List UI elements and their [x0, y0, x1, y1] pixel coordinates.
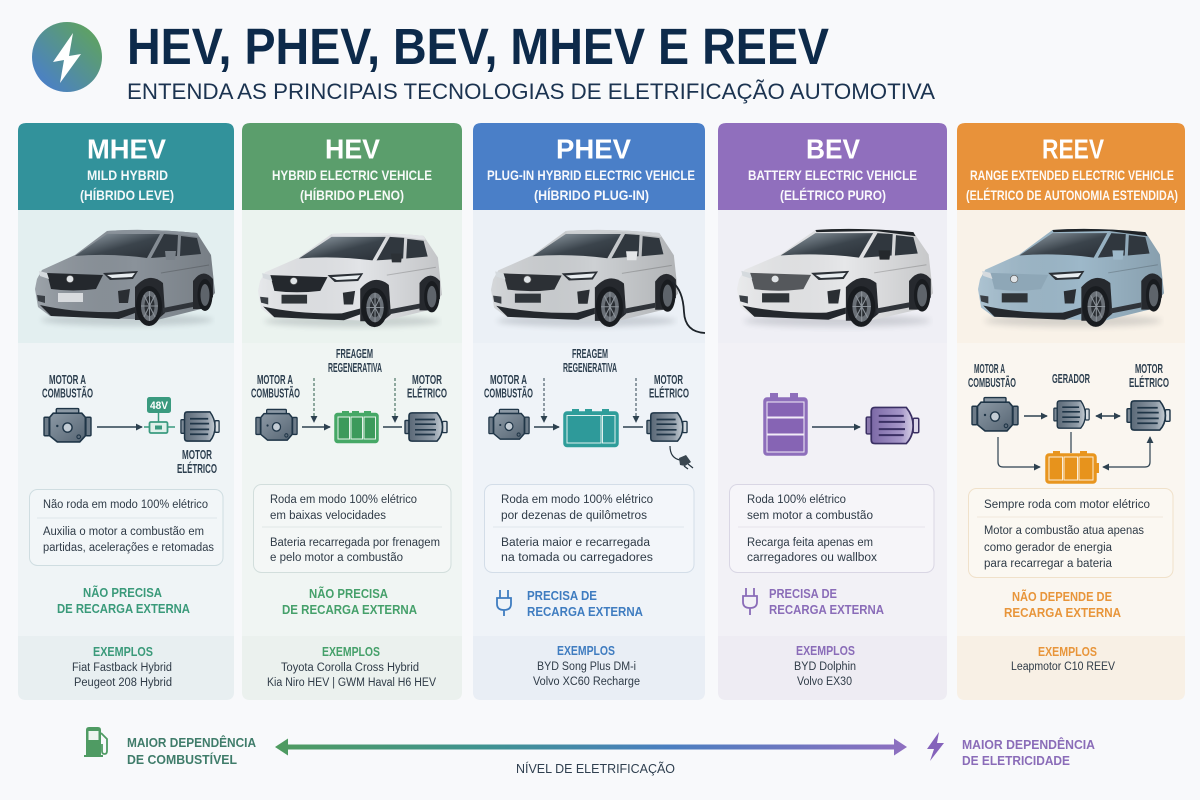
examples: HEV: Toyota Corolla Cross Hybrid — [281, 662, 419, 674]
label: motor a combustão — [484, 373, 533, 400]
heading: MHEV: (HÍBRIDO LEVE) — [80, 187, 174, 203]
text box: HEV facts: e pelo motor a combustão — [270, 552, 403, 564]
heading: BEV — [718, 123, 947, 210]
recharge note: REEV: RECARGA EXTERNA — [1004, 606, 1121, 620]
text box: HEV facts: em baixas velocidades — [270, 510, 386, 522]
examples: MHEV: Fiat Fastback Hybrid — [72, 662, 172, 674]
arrow: battery to motor — [812, 426, 860, 428]
examples: MHEV: Peugeot 208 Hybrid — [74, 677, 172, 689]
text box: PHEV facts: Bateria maior e recarregada — [501, 537, 651, 549]
arrow: engine to converter — [97, 426, 142, 428]
examples: HEV — [267, 645, 436, 689]
image band: REEV — [957, 210, 1185, 343]
heading: HEV: HYBRID ELECTRIC VEHICLE — [272, 167, 432, 183]
examples band: HEV — [242, 636, 462, 700]
icon: 48V converter: 48V — [150, 400, 169, 412]
icon: electricity bolt — [927, 732, 944, 761]
examples band: PHEV — [473, 636, 705, 700]
text box: REEV facts: Sempre roda com motor elétrico — [984, 499, 1150, 511]
arrow: regenerative braking 1 — [313, 378, 315, 422]
recharge note: MHEV — [57, 585, 190, 616]
label: fuel dependence — [127, 735, 256, 767]
label: motor elétrico: ELÉTRICO — [649, 386, 689, 400]
label: nível de eletrificação: NÍVEL DE ELETRIFICAÇÃO — [516, 761, 675, 776]
icon: purple battery — [764, 393, 807, 455]
heading: BEV: (ELÉTRICO PURO) — [780, 187, 886, 203]
recharge note: HEV: DE RECARGA EXTERNA — [282, 603, 417, 617]
label: freagem regenerativa: REGENERATIVA — [328, 361, 382, 375]
recharge note: BEV: PRECISA DE — [769, 587, 837, 601]
icon: combustion engine — [972, 398, 1018, 431]
label: motor elétrico: ELÉTRICO — [177, 461, 217, 476]
icon: electric motor — [405, 413, 447, 441]
heading: REEV — [957, 123, 1185, 210]
text box: PHEV facts: por dezenas de quilômetros — [501, 510, 647, 522]
recharge note: PHEV: RECARGA EXTERNA — [527, 605, 643, 619]
icon: combustion engine — [489, 409, 529, 439]
icon: electric motor — [866, 407, 919, 444]
text box: BEV facts: Recarga feita apenas em — [747, 537, 873, 549]
label: motor a combustão — [968, 362, 1016, 390]
arrow: generator to motor — [1096, 415, 1120, 417]
text box: BEV facts: carregadores ou wallbox — [747, 552, 877, 564]
icon: lightning logo — [32, 22, 102, 92]
text box: MHEV facts: Auxilia o motor a combustão em — [43, 526, 204, 538]
heading: PHEV: (HÍBRIDO PLUG-IN) — [534, 187, 649, 203]
text box: MHEV facts: partidas, acelerações e retomadas — [43, 542, 214, 554]
heading: MHEV: MILD HYBRID — [87, 167, 168, 183]
icon: combustion engine — [256, 409, 297, 440]
arrow: regenerative braking 1 — [543, 378, 545, 422]
text box: REEV facts: Motor a combustão atua apenas — [984, 525, 1144, 537]
connector: generator to battery — [1070, 432, 1072, 453]
recharge note: PHEV: PRECISA DE — [527, 589, 597, 603]
image band: BEV — [718, 210, 947, 343]
icon: 48V converter — [144, 397, 175, 433]
icon: charging plug — [670, 446, 693, 469]
heading: HEV — [242, 123, 462, 210]
panel: HEV — [242, 123, 462, 700]
label: freagem regenerativa: REGENERATIVA — [563, 361, 617, 375]
label: motor a combustão: COMBUSTÃO — [968, 375, 1016, 390]
arrow: electrification scale — [275, 738, 907, 756]
heading: MHEV: MHEV — [87, 134, 166, 164]
label: electricity dependence — [962, 737, 1095, 768]
heading: BEV: BEV — [806, 134, 860, 164]
title: HEV, PHEV, BEV, MHEV E REEV — [127, 18, 829, 75]
label: motor elétrico: MOTOR — [412, 373, 442, 387]
icon: combustion engine — [44, 409, 91, 442]
diagram: BEV powertrain — [764, 393, 919, 455]
label: motor a combustão — [42, 373, 93, 400]
icon: teal battery — [564, 409, 618, 446]
examples: REEV — [1011, 645, 1115, 673]
text box: BEV facts: sem motor a combustão — [747, 510, 873, 522]
recharge note: PHEV — [527, 589, 643, 619]
charging cable — [672, 282, 705, 333]
subtitle: ENTENDA AS PRINCIPAIS TECNOLOGIAS DE ELETRIFICAÇÃO AUTOMOTIVA — [127, 79, 935, 104]
examples: BEV: Volvo EX30 — [797, 676, 852, 688]
recharge note: MHEV: DE RECARGA EXTERNA — [57, 602, 190, 616]
recharge note: BEV: RECARGA EXTERNA — [769, 603, 884, 617]
heading: MHEV — [18, 123, 234, 210]
icon: purple plug — [743, 588, 757, 615]
image band: HEV — [242, 210, 462, 343]
arrow: battery to motor — [1103, 437, 1150, 467]
text box: HEV facts: Bateria recarregada por frenagem — [270, 537, 440, 549]
label: motor elétrico: MOTOR — [654, 373, 683, 387]
label: fuel dependence: DE COMBUSTÍVEL — [127, 752, 237, 767]
label: motor a combustão: COMBUSTÃO — [42, 386, 93, 400]
label: motor elétrico: ELÉTRICO — [1129, 375, 1169, 390]
text box: BEV facts: Roda 100% elétrico — [747, 494, 846, 506]
text box: REEV facts: como gerador de energia — [984, 542, 1113, 554]
icon: fuel pump — [84, 727, 107, 757]
icon: electric motor — [1127, 401, 1170, 430]
label: motor a combustão: MOTOR A — [490, 373, 527, 387]
label: motor a combustão: COMBUSTÃO — [251, 386, 300, 400]
examples band: BEV — [718, 636, 947, 700]
car: white electric hatch — [737, 229, 933, 327]
header — [32, 18, 935, 104]
text box: PHEV facts: na tomada ou carregadores — [501, 552, 653, 564]
label: motor elétrico: MOTOR — [182, 448, 212, 462]
icon: electric motor — [647, 413, 687, 441]
examples: REEV: Leapmotor C10 REEV — [1011, 661, 1115, 673]
heading: PHEV — [473, 123, 705, 210]
text box: BEV facts — [730, 484, 934, 572]
panel: BEV — [718, 123, 947, 700]
text box: PHEV facts: Roda em modo 100% elétrico — [501, 494, 653, 506]
diagram: HEV powertrain — [251, 347, 447, 442]
arrow: engine to generator — [1024, 415, 1047, 417]
examples: HEV: Kia Niro HEV | GWM Haval H6 HEV — [267, 677, 436, 689]
label: electricity dependence: MAIOR DEPENDÊNCIA — [962, 737, 1095, 752]
image band: PHEV — [473, 210, 705, 343]
heading: BEV: BATTERY ELECTRIC VEHICLE — [748, 167, 917, 183]
arrow: regenerative braking 2 — [394, 378, 396, 422]
examples: BEV: BYD Dolphin — [794, 661, 856, 673]
recharge note: HEV: NÃO PRECISA — [309, 586, 388, 601]
examples: MHEV: EXEMPLOS — [93, 645, 153, 659]
examples: BEV: EXEMPLOS — [796, 644, 855, 658]
text box: HEV facts: Roda em modo 100% elétrico — [270, 494, 417, 506]
label: gerador: GERADOR — [1052, 372, 1090, 386]
panel: REEV — [957, 123, 1185, 700]
examples: HEV: EXEMPLOS — [322, 645, 380, 659]
examples band: REEV — [957, 636, 1185, 700]
icon: green battery — [335, 411, 378, 442]
examples: PHEV: Volvo XC60 Recharge — [533, 676, 640, 688]
arrow: regenerative braking 2 — [635, 378, 637, 422]
label: motor a combustão: MOTOR A — [49, 373, 86, 387]
label: motor elétrico — [407, 373, 447, 400]
arrow: engine to battery — [534, 426, 559, 428]
text box: REEV facts — [968, 488, 1173, 578]
label: motor elétrico — [177, 448, 217, 476]
label: freagem regenerativa — [563, 347, 617, 375]
label: freagem regenerativa — [328, 347, 382, 375]
label: electricity dependence: DE ELETRICIDADE — [962, 754, 1070, 768]
text box: HEV facts — [254, 484, 451, 572]
label: motor a combustão — [251, 373, 300, 400]
examples band: MHEV — [18, 636, 234, 700]
label: motor elétrico — [649, 373, 689, 400]
panel: MHEV — [18, 123, 234, 700]
car: white SUV — [258, 233, 442, 327]
examples: PHEV: EXEMPLOS — [557, 644, 615, 658]
arrow: engine to battery — [998, 437, 1040, 467]
recharge note: REEV — [1004, 589, 1121, 620]
label: motor elétrico: MOTOR — [1135, 362, 1163, 376]
arrow: engine to battery — [302, 426, 330, 428]
heading: REEV: REEV — [1042, 134, 1104, 164]
heading: PHEV: PLUG-IN HYBRID ELECTRIC VEHICLE — [487, 167, 695, 183]
heading: PHEV: PHEV — [556, 134, 631, 164]
heading: HEV: HEV — [325, 134, 380, 164]
car: blue SUV — [978, 229, 1164, 327]
examples: BEV — [794, 644, 856, 688]
connector: battery to motor — [383, 426, 402, 428]
label: fuel dependence: MAIOR DEPENDÊNCIA — [127, 735, 256, 750]
label: motor a combustão: MOTOR A — [974, 362, 1005, 376]
examples: PHEV: BYD Song Plus DM-i — [537, 661, 636, 673]
car: gray SUV — [35, 230, 215, 326]
connector: battery to motor — [623, 426, 643, 428]
icon: blue plug — [497, 590, 511, 616]
panel: PHEV — [473, 123, 705, 700]
text box: REEV facts: para recarregar a bateria — [984, 558, 1113, 570]
label: freagem regenerativa: FREAGEM — [336, 347, 373, 361]
icon: electric motor — [181, 412, 219, 441]
icon: orange battery — [1046, 451, 1099, 483]
examples: REEV: EXEMPLOS — [1038, 645, 1097, 659]
recharge note: BEV — [769, 587, 884, 617]
text box: MHEV facts: Não roda em modo 100% elétrico — [43, 499, 208, 511]
footer scale — [84, 727, 1095, 776]
icon: generator — [1054, 401, 1089, 428]
label: motor elétrico: ELÉTRICO — [407, 386, 447, 400]
recharge note: MHEV: NÃO PRECISA — [83, 585, 162, 600]
text box: PHEV facts — [484, 484, 694, 572]
examples: MHEV — [72, 645, 172, 689]
image band: MHEV — [18, 210, 234, 343]
label: freagem regenerativa: FREAGEM — [572, 347, 608, 361]
diagram: PHEV powertrain — [484, 347, 693, 469]
label: motor a combustão: COMBUSTÃO — [484, 386, 533, 400]
recharge note: HEV — [282, 586, 417, 617]
examples: PHEV — [533, 644, 640, 688]
recharge note: REEV: NÃO DEPENDE DE — [1012, 589, 1112, 604]
car: silver SUV — [491, 230, 678, 327]
heading: HEV: (HÍBRIDO PLENO) — [300, 187, 404, 203]
diagram: MHEV powertrain — [42, 373, 219, 476]
label: motor a combustão: MOTOR A — [257, 373, 293, 387]
label: motor elétrico — [1129, 362, 1169, 390]
diagram: REEV powertrain — [968, 362, 1170, 483]
text box: MHEV facts — [30, 490, 223, 566]
